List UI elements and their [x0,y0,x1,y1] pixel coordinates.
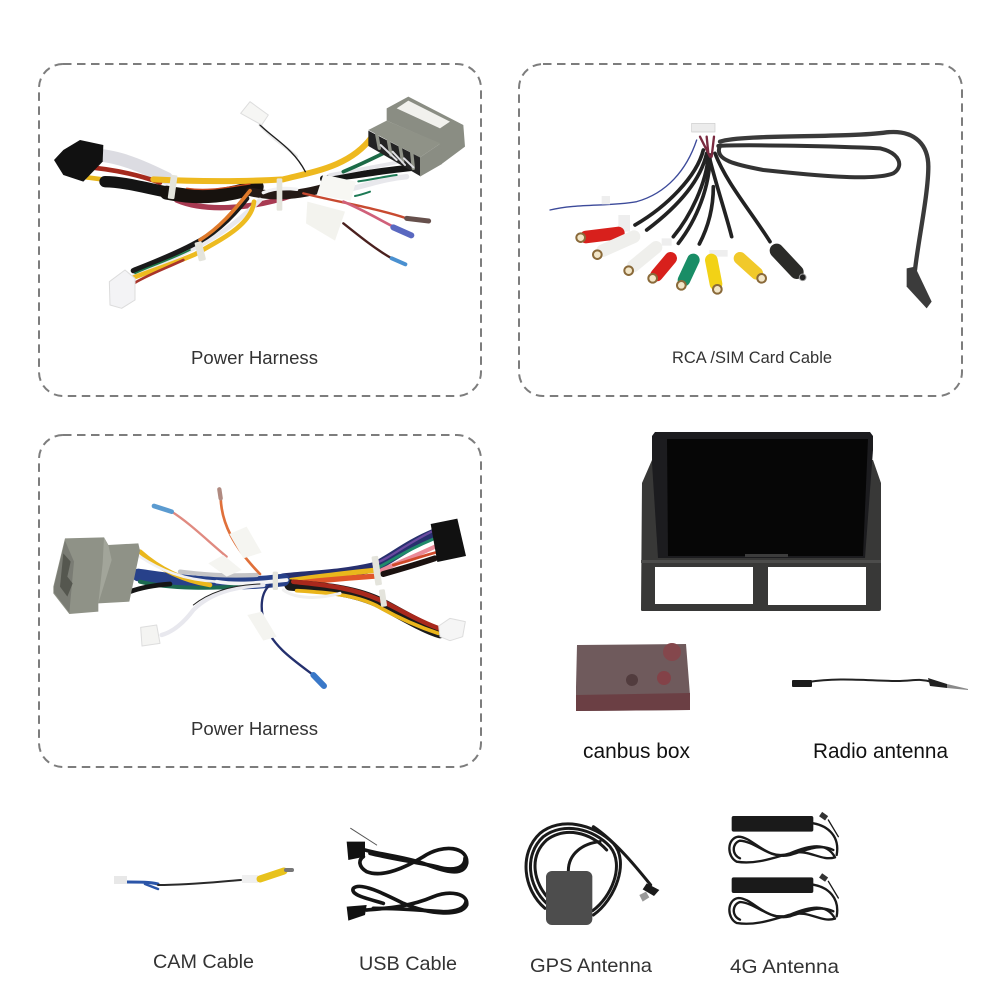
USB cable lower [347,886,467,921]
panel: power harness top [39,64,481,396]
4G antenna lower [729,873,838,924]
small white connector with lead [241,102,305,172]
label: GPS antenna: GPS Antenna [530,955,652,977]
label: USB cable: USB Cable [359,953,457,975]
blue lead with tag [247,585,324,686]
head unit with fascia frame [641,432,881,611]
panel: power harness lower [39,435,481,767]
white branch with small connector [141,584,263,646]
wire tags [208,527,262,577]
RCA cable illustration [550,123,932,308]
pink lead with tip [154,506,227,557]
black multi-pin connector [54,140,103,182]
cable ties [168,175,282,262]
GPS antenna [526,824,659,925]
SIM module [907,267,932,308]
bare wire leads with tips [303,193,429,264]
white harness connector [109,270,135,308]
RCA plugs [586,233,797,284]
label: power harness lower: Power Harness [191,719,318,739]
label: CAM cable: CAM Cable [153,951,254,973]
label: radio antenna: Radio antenna [813,740,948,763]
multi-pin white plug [692,123,715,132]
USB cable upper [347,828,467,874]
black multi-pin connector [431,519,466,562]
label: RCA SIM card cable: RCA /SIM Card Cable [672,348,832,367]
harness illustration lower [53,489,466,686]
harness illustration top [54,97,465,308]
grey vehicle connector [53,537,140,614]
label: power harness top: Power Harness [191,348,318,368]
cable ties [273,556,387,607]
wire tags [306,174,356,241]
orange lead with tip [219,489,260,574]
radio antenna cable [792,678,968,690]
white harness connector [439,618,465,641]
plug tips [576,233,806,294]
USB cables [347,828,467,921]
canbus box [576,643,690,711]
label: canbus box: canbus box [583,740,690,763]
panel: RCA and SIM card cable [519,64,962,396]
4G antennas [729,812,838,924]
4G antenna upper [729,812,838,862]
camera cable [114,870,292,889]
wire tags [602,196,728,257]
grey vehicle connector [368,97,465,177]
label: 4G antenna: 4G Antenna [730,956,839,978]
